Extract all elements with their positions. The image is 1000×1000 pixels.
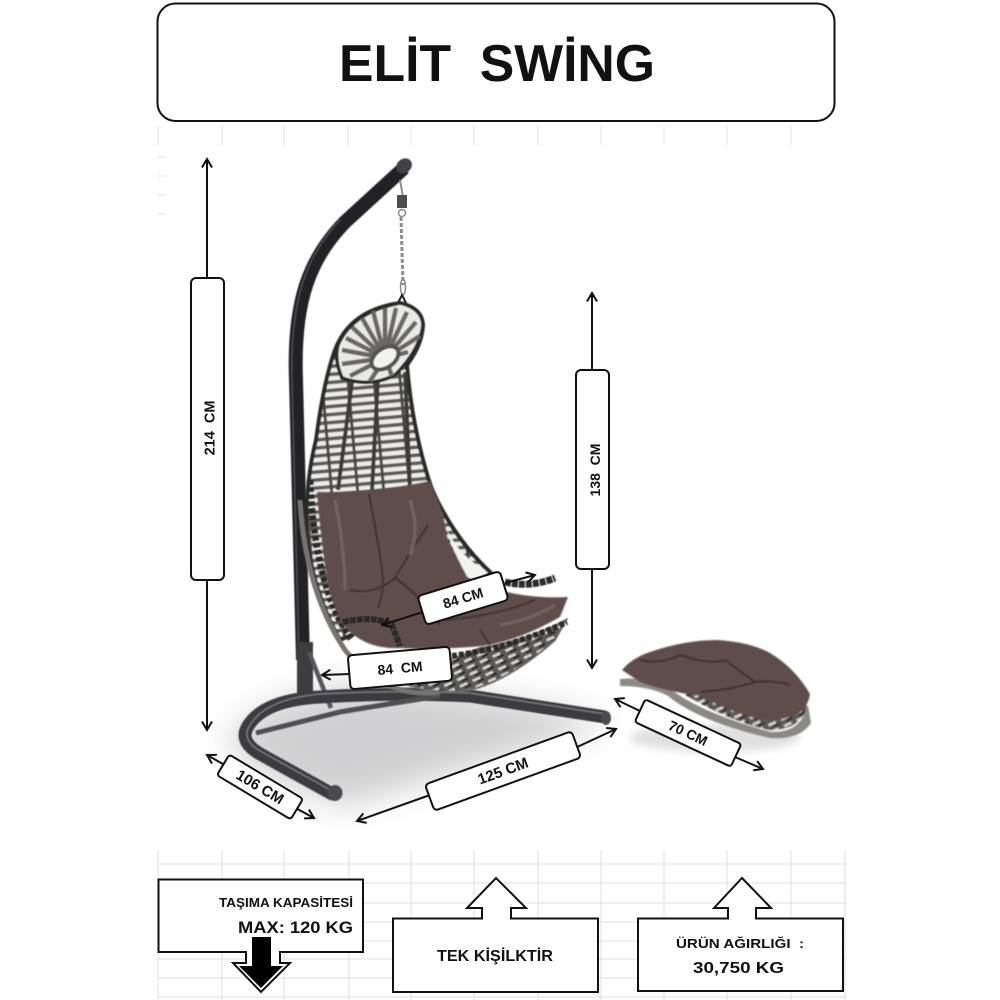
dimension: 84 cm seat depth: 84 CM: [377, 658, 423, 678]
dimension: 125 cm base: 125 CM: [476, 754, 531, 788]
wicker chair shell: [300, 303, 567, 693]
dimension: 106 cm base: [207, 755, 314, 819]
callout: carrying capacity: MAX: 120 KG: [238, 918, 353, 937]
dimension arrow: 214 cm height: [191, 159, 224, 730]
dimension: 70 cm footrest: [615, 699, 763, 769]
dimension arrow: 138 cm height: 138 CM: [587, 444, 603, 496]
swing stand: [245, 155, 611, 801]
seat cushion: [317, 481, 568, 649]
dimension: 70 cm footrest: 70 CM: [666, 717, 710, 749]
floor shadow: [225, 686, 800, 805]
callout: product weight: 30,750 KG: [693, 960, 784, 977]
headrest sunburst: [337, 303, 423, 382]
callout: product weight: ÜRÜN AĞIRLIĞI :: [676, 936, 804, 951]
dimension arrow: 214 cm height: 214 CM: [202, 401, 218, 455]
dimension arrow: 138 cm height: [576, 293, 609, 668]
title: ELİT SWİNG: [339, 35, 655, 93]
footrest: [620, 640, 811, 738]
dimension: 84 cm seat width: [382, 571, 535, 625]
callout: carrying capacity: [158, 880, 363, 992]
chain: [397, 180, 407, 303]
dimension: 125 cm base: [357, 729, 616, 821]
callout: carrying capacity: TAŞIMA KAPASİTESİ: [219, 895, 353, 910]
callout: single person: TEK KİŞİLKTİR: [437, 947, 553, 965]
title: [158, 4, 834, 121]
dimension: 84 cm seat depth: [322, 647, 452, 689]
dimension: 106 cm base: 106 CM: [233, 767, 287, 808]
icon: down arrow: [239, 937, 283, 988]
callout: product weight: [638, 878, 843, 991]
armrest braid: [343, 619, 400, 646]
dimension: 84 cm seat width: 84 CM: [441, 584, 485, 612]
callout: single person: [393, 878, 598, 992]
